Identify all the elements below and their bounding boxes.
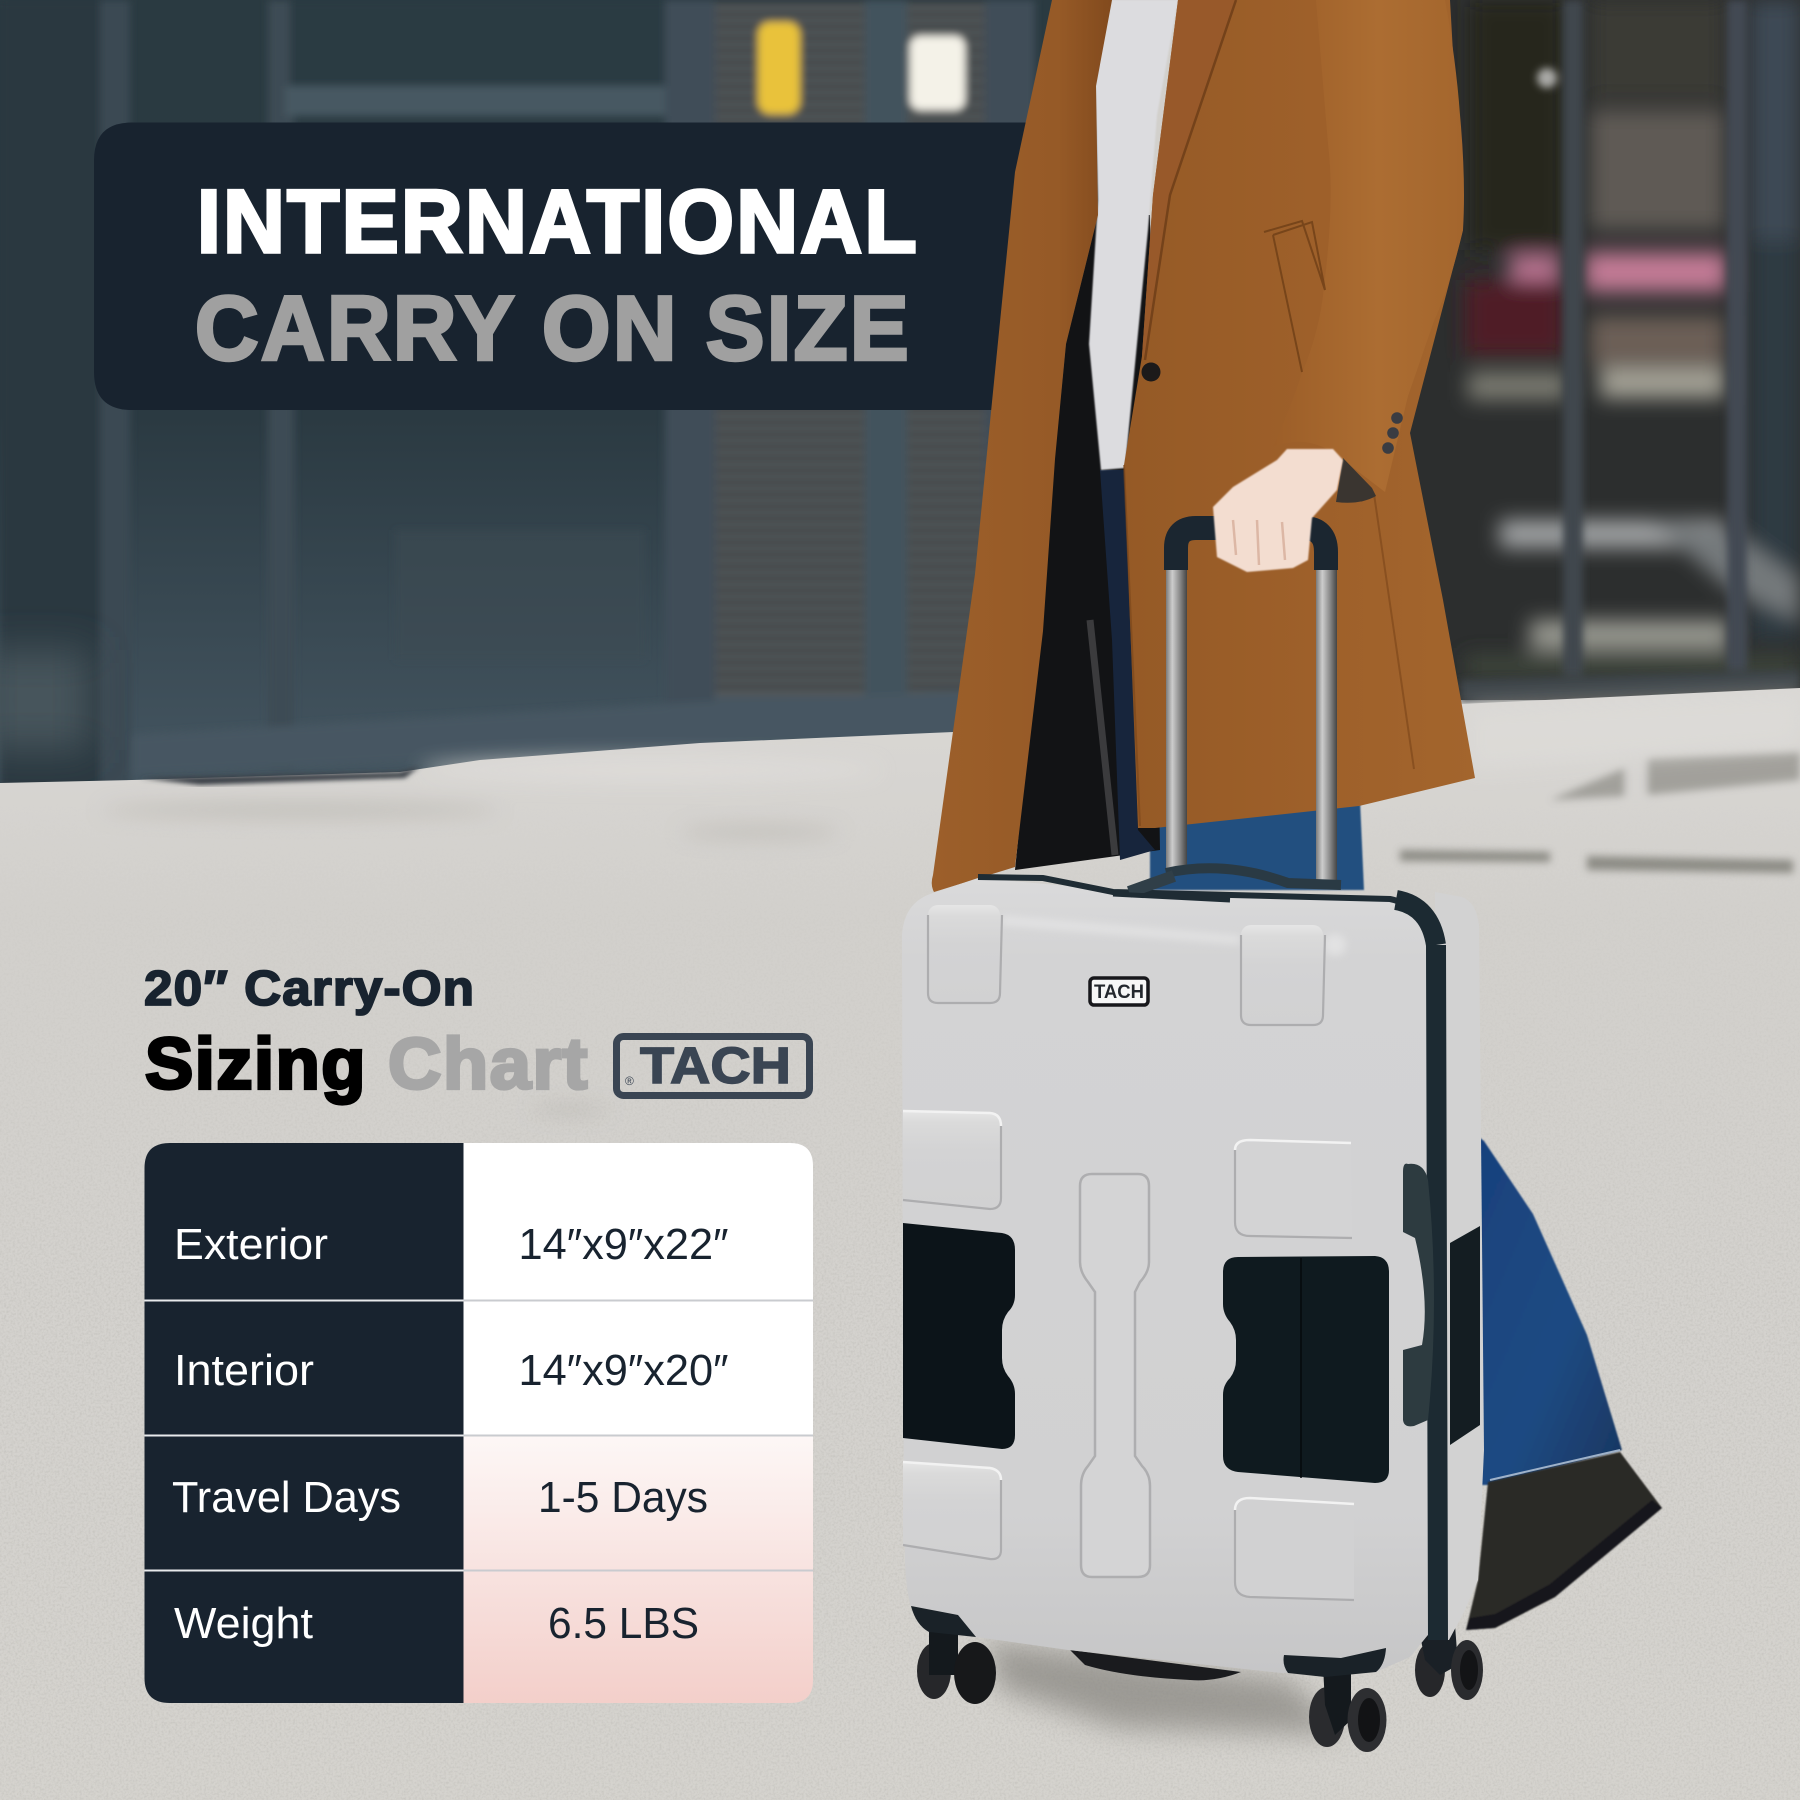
heading word sizing: Sizing <box>145 1024 367 1104</box>
title banner <box>94 122 1040 410</box>
left connector patch <box>903 1223 1015 1449</box>
right background windows <box>1400 0 1800 700</box>
right connector patch <box>1223 1256 1389 1483</box>
TACH logo <box>616 1036 810 1096</box>
side connector patch <box>1450 1226 1480 1445</box>
value column tinted rows <box>464 1436 813 1703</box>
shell highlights <box>1002 916 1346 956</box>
row: interior <box>174 1346 728 1395</box>
side zipper <box>1396 900 1438 1640</box>
top zipper and grab handle <box>978 868 1432 940</box>
row: interior: 14″x9″x20″ <box>518 1346 728 1395</box>
heading line 1: 20″ Carry-On <box>144 962 475 1016</box>
row: travel days <box>172 1473 708 1522</box>
title line 1: INTERNATIONAL <box>197 171 919 271</box>
sizing table <box>144 1143 813 1703</box>
carry-on suitcase <box>902 868 1484 1752</box>
telescopic handle <box>1166 528 1337 886</box>
jeans hem <box>1490 1450 1620 1480</box>
coat right panel <box>1124 0 1475 828</box>
TACH logo: ® <box>625 1074 634 1088</box>
panel top highlights <box>903 1111 1354 1510</box>
lower leg in jeans <box>1470 1130 1622 1485</box>
side carry handle <box>1403 1164 1434 1426</box>
front shell <box>902 878 1432 1673</box>
coat seams <box>1124 465 1414 826</box>
row dividers <box>144 1300 813 1570</box>
row: interior: Interior <box>174 1346 314 1395</box>
central I-shaped recess <box>1080 1174 1150 1577</box>
rear shell <box>1435 892 1484 1640</box>
hand <box>1213 449 1343 572</box>
embossed panels <box>903 905 1354 1600</box>
row: exterior: 14″x9″x22″ <box>518 1220 728 1269</box>
inner lining and jeans <box>1015 215 1160 870</box>
t-shirt <box>1089 0 1178 470</box>
lapel <box>1142 0 1236 360</box>
row: exterior <box>174 1220 728 1269</box>
shaded panel edges <box>903 915 1354 1600</box>
ground shadow under suitcase <box>985 1640 1345 1735</box>
TACH logo: TACH <box>640 1037 791 1094</box>
corner bumpers <box>911 1606 1386 1677</box>
coat button <box>1142 362 1160 382</box>
row: travel days: 1-5 Days <box>538 1473 708 1522</box>
row: exterior: Exterior <box>174 1220 328 1269</box>
coat left panel <box>932 0 1112 892</box>
wheels <box>917 1625 1483 1752</box>
photo background: pavement <box>0 688 1800 1800</box>
photo background: blurred building facade <box>0 0 1800 800</box>
heading word chart: Chart <box>388 1024 589 1104</box>
value column <box>464 1143 813 1436</box>
sleeve buttons <box>1382 412 1403 454</box>
row: travel days: Travel Days <box>172 1473 401 1522</box>
coat sleeve <box>1273 0 1464 492</box>
upper jeans <box>1150 800 1364 890</box>
row: weight: Weight <box>174 1599 313 1648</box>
person walking in brown coat <box>932 0 1662 1630</box>
shirt cuff <box>1336 458 1376 503</box>
row: weight: 6.5 LBS <box>548 1599 699 1648</box>
pocket <box>1264 221 1325 372</box>
shoe <box>1466 1452 1662 1630</box>
row: weight <box>174 1599 699 1648</box>
label column <box>144 1143 464 1703</box>
sizing chart heading <box>144 962 589 1104</box>
suitcase logo badge <box>1090 978 1148 1005</box>
suitcase logo badge: TACH <box>1094 982 1144 1003</box>
title line 2: CARRY ON SIZE <box>195 278 911 380</box>
